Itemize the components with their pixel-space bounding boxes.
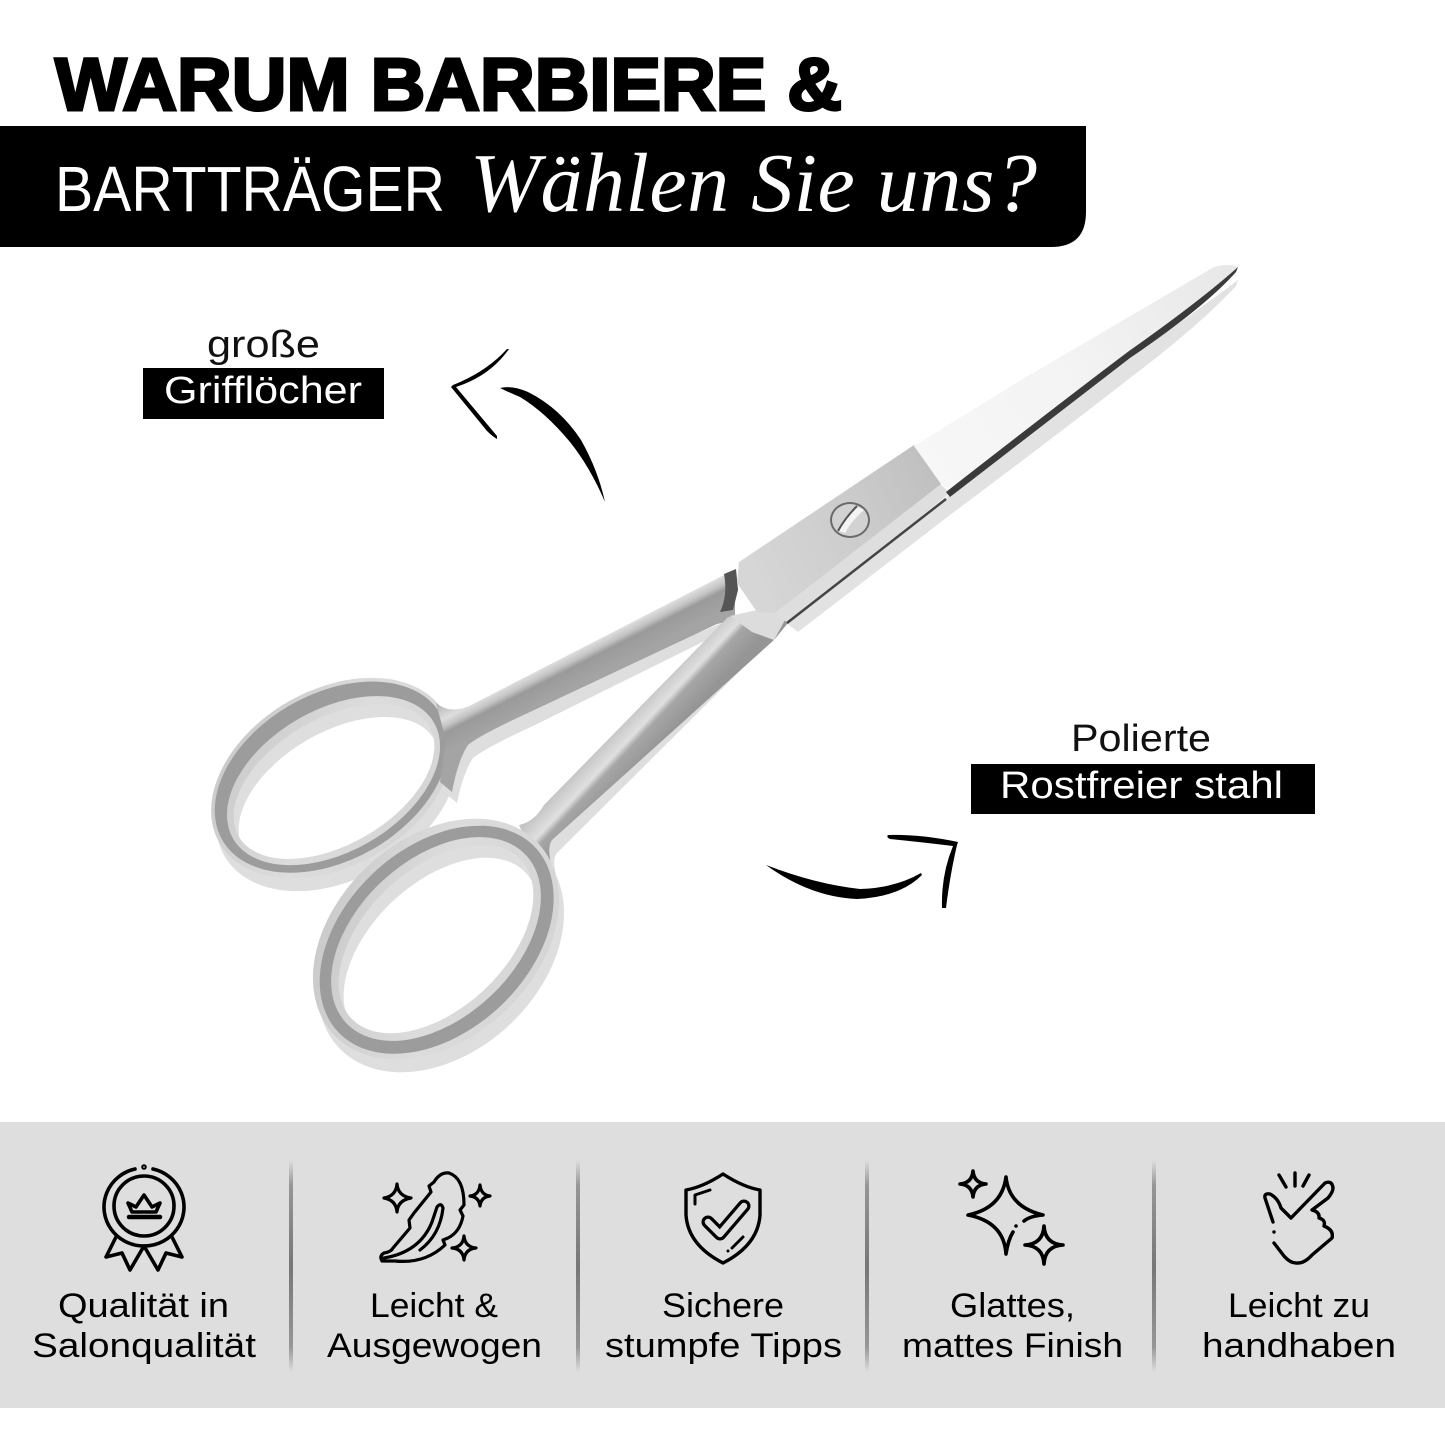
feature text: Qualität in Salonqualität: Qualität in (58, 1287, 229, 1325)
lower blade strip (775, 483, 950, 624)
feature text: Glattes, mattes Finish (902, 1287, 1123, 1365)
feature text: Sichere stumpfe Tipps: stumpfe Tipps (605, 1327, 842, 1365)
feature text: Sichere stumpfe Tipps (605, 1287, 842, 1365)
arrow: points to grip label (451, 349, 605, 502)
feature text: Leicht und Ausgewogen: Ausgewogen (327, 1327, 542, 1365)
callout: polished steel (971, 718, 1315, 814)
blade (914, 265, 1238, 491)
pivot screw (830, 502, 870, 538)
scissors shadow (180, 623, 779, 1121)
upper finger ring (175, 637, 489, 919)
feature text: Leicht zu handhaben (1202, 1287, 1396, 1365)
callout text: Polierte: Polierte (1071, 718, 1211, 760)
callout: grip holes (143, 324, 384, 419)
feature text: Glattes, mattes Finish: Glattes, (950, 1287, 1075, 1325)
upper handle shank (436, 570, 735, 792)
callout box: Grifflöcher (143, 368, 384, 419)
lower handle shank (519, 612, 797, 872)
title line two: BARTTRÄGER (55, 153, 445, 225)
title banner (0, 126, 1086, 247)
title line one: WARUM BARBIERE & (55, 43, 842, 126)
icon: shield with check (686, 1174, 760, 1263)
joint highlight (730, 610, 790, 640)
feature text: Sichere stumpfe Tipps: Sichere (662, 1287, 784, 1325)
callout text: große: große (207, 324, 320, 366)
icon: sparkles (960, 1171, 1063, 1264)
icon: award medal (104, 1166, 184, 1270)
feature text: Leicht und Ausgewogen: Leicht & (370, 1287, 498, 1325)
script heading: Wählen Sie uns? (470, 137, 1037, 230)
panel: features (0, 1122, 1445, 1408)
joint gap (720, 569, 738, 612)
feature text: Leicht zu handhaben: Leicht zu (1228, 1287, 1370, 1325)
callout box: Grifflöcher: Grifflöcher (164, 370, 362, 412)
feature text: Leicht und Ausgewogen (327, 1287, 542, 1365)
blade shadow (785, 280, 1238, 632)
feature text: Qualität in Salonqualität (32, 1287, 257, 1365)
scissors illustration (175, 265, 1238, 1121)
callout box: Rostfreier stahl (971, 764, 1315, 814)
callout box: Rostfreier stahl: Rostfreier stahl (1000, 765, 1283, 807)
pivot plate (737, 445, 941, 613)
feature text: Glattes, mattes Finish: mattes Finish (902, 1327, 1123, 1365)
arrow: points to steel label (766, 835, 958, 908)
blade cutting edge (946, 267, 1238, 497)
icon: feather with sparkles (381, 1173, 490, 1261)
feature text: Leicht zu handhaben: handhaben (1202, 1327, 1396, 1365)
lower finger ring (265, 770, 607, 1108)
icon: snapping hand (1265, 1173, 1333, 1263)
feature text: Qualität in Salonqualität: Salonqualität (32, 1327, 257, 1365)
